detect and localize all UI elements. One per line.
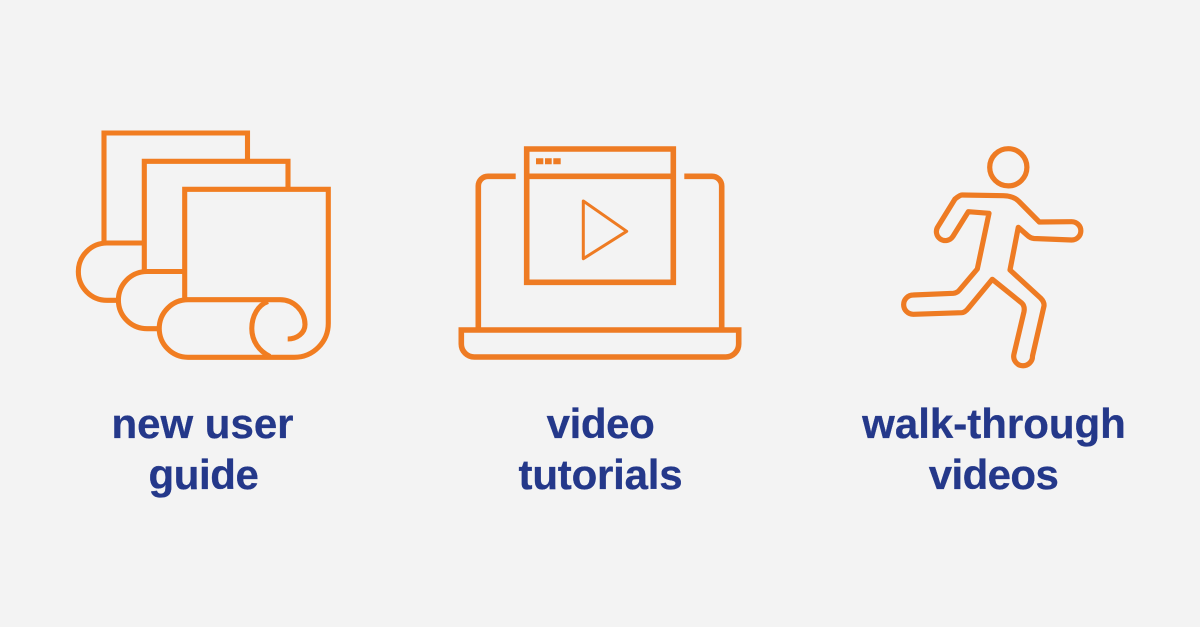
label: new user guide <box>111 400 294 498</box>
label: walk-through videos: walk-through <box>861 400 1126 447</box>
body <box>904 195 1081 366</box>
label: new user guide: guide <box>148 451 258 498</box>
label: video tutorials <box>519 400 682 498</box>
label: walk-through videos: videos <box>929 451 1058 498</box>
icon: running person <box>904 149 1081 366</box>
label: video tutorials: tutorials <box>519 451 682 498</box>
video window <box>527 149 673 282</box>
laptop screen outline <box>478 176 722 330</box>
play button <box>583 201 627 259</box>
label: walk-through videos <box>861 400 1126 498</box>
icon: laptop with video window <box>461 149 739 357</box>
window dots <box>536 158 561 164</box>
laptop base <box>461 330 739 357</box>
head <box>990 149 1027 186</box>
icon: stacked document scrolls <box>78 133 328 357</box>
label: new user guide: new user <box>111 400 294 447</box>
label: video tutorials: video <box>547 400 654 447</box>
